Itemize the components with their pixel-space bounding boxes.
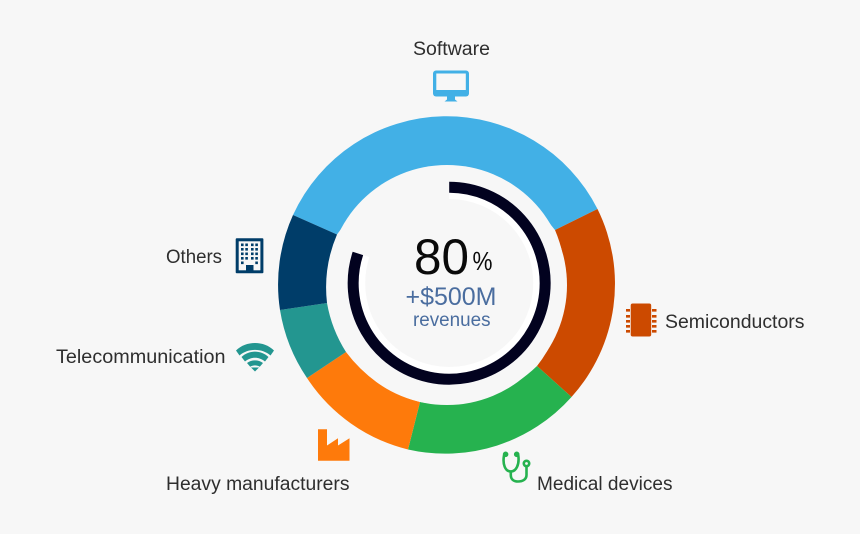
center figure: 80%: % xyxy=(472,246,492,276)
donut chart xyxy=(278,116,615,454)
label: Others: Others xyxy=(166,247,222,268)
segment: heavy manufacturers xyxy=(307,352,420,450)
label: Heavy manufacturers: Heavy manufacturers xyxy=(166,474,350,495)
segment: medical devices xyxy=(408,366,572,454)
icon: chip xyxy=(626,304,656,336)
segment: semiconductors xyxy=(537,209,615,397)
icon: stethoscope xyxy=(504,453,529,482)
center text: revenues: revenues xyxy=(413,309,491,331)
segment: software xyxy=(293,116,598,234)
center figure: 80%: 80 xyxy=(414,229,469,285)
icon: monitor xyxy=(433,70,469,102)
inner white arc xyxy=(362,196,537,370)
center text: +$500M: +$500M xyxy=(406,283,496,311)
segment: others xyxy=(278,215,337,310)
icon: factory xyxy=(318,429,350,461)
dark progress arc xyxy=(353,187,545,379)
label: Software: Software xyxy=(413,39,490,60)
icon: wifi xyxy=(236,343,274,372)
icon: building xyxy=(236,238,263,273)
segment: telecommunication xyxy=(280,303,346,378)
progress ring xyxy=(353,187,545,379)
label: Semiconductors: Semiconductors xyxy=(665,312,804,333)
donut hole xyxy=(327,165,567,405)
label: Telecommunication: Telecommunication xyxy=(56,347,226,368)
label: Medical devices: Medical devices xyxy=(537,474,672,495)
